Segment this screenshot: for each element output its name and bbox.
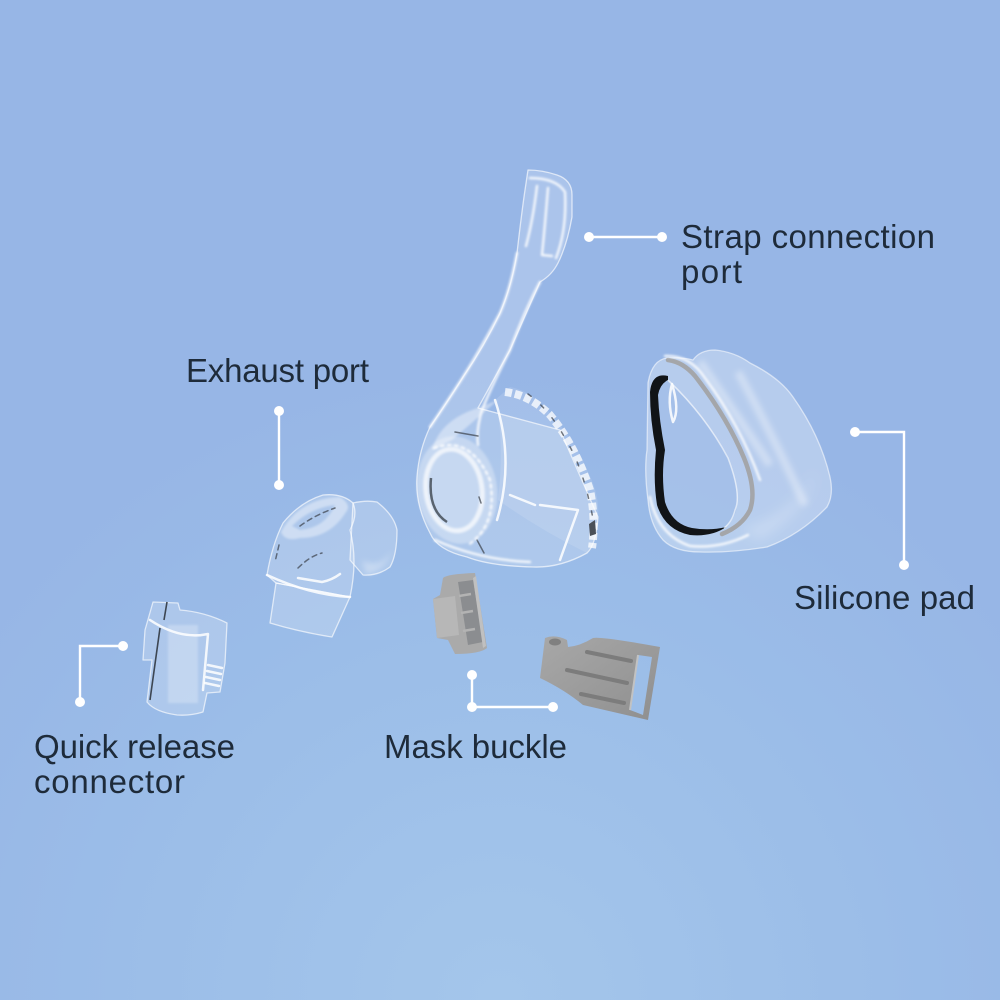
callout: exhaust port	[186, 352, 369, 490]
sub-part: frame ring	[410, 431, 504, 553]
part: quick release connector	[143, 602, 227, 715]
callout: strap connection port: Strap connection	[681, 218, 935, 255]
callout: silicone pad: Silicone pad	[794, 579, 975, 616]
callout: mask buckle	[384, 670, 567, 765]
callout: quick release connector: connector	[34, 763, 185, 800]
part: exhaust port elbow	[267, 495, 397, 637]
sub-part: inner black seal	[650, 375, 726, 535]
callout: strap connection port	[584, 218, 935, 290]
part: silicone pad	[646, 350, 831, 552]
part: mask frame with strap arm	[410, 170, 598, 567]
sub-part: grey rim	[668, 360, 752, 534]
callout: mask buckle: Mask buckle	[384, 728, 567, 765]
sub-part: frame flange ribs	[505, 392, 596, 548]
callout: strap connection port: port	[681, 253, 742, 290]
callout: quick release connector	[34, 641, 235, 800]
part: mask buckle large	[540, 636, 660, 720]
callout: quick release connector: Quick release	[34, 728, 235, 765]
callout: silicone pad	[794, 427, 975, 616]
part: mask buckle small	[433, 573, 487, 654]
callout: exhaust port: Exhaust port	[186, 352, 369, 389]
